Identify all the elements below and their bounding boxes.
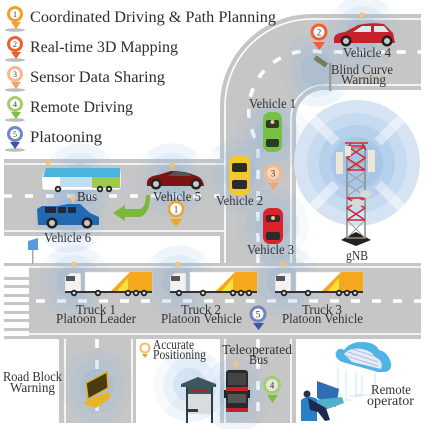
truck 3: [275, 261, 363, 296]
label: truck 1: Truck 1: [76, 302, 116, 317]
label: vehicle 1: Vehicle 1: [249, 96, 296, 111]
legend item 1: Coordinated Driving & Path Planning: [30, 9, 276, 26]
teleoperated bus: [224, 360, 250, 412]
legend item 2: Real-time 3D Mapping: [30, 39, 178, 56]
label: gNB: gNB: [346, 248, 368, 263]
pin 5: [251, 307, 265, 330]
icon: accurate positioning: [140, 344, 150, 358]
label: truck 1: Platoon Leader: [56, 311, 136, 326]
label: vehicle 6: Vehicle 6: [44, 230, 91, 245]
label: truck 3: Platoon Vehicle: [282, 311, 363, 326]
truck 2: [170, 261, 257, 296]
label: teleoperated bus: Bus: [249, 352, 268, 367]
label: vehicle 5: Vehicle 5: [153, 189, 201, 204]
legend item 3: [5, 68, 165, 92]
vehicle 1 green car: [263, 112, 282, 152]
gNB tower: [336, 143, 375, 246]
truck 1: [65, 261, 152, 296]
legend item 5: [5, 128, 102, 152]
legend item 3: 3: [13, 70, 17, 79]
road: lower horizontal road: [29, 263, 421, 339]
bus: [42, 159, 121, 192]
pin 2: [312, 25, 326, 50]
crosswalk: [4, 263, 29, 339]
road: bottom-right side road: [220, 339, 296, 423]
label: road block warning: Warning: [10, 380, 55, 395]
legend item 4: [5, 98, 133, 122]
gNB coverage circle: [294, 100, 420, 226]
label: accurate positioning: [153, 337, 206, 362]
road block sign: [84, 372, 110, 408]
road: curved main road: [220, 14, 421, 263]
label: accurate positioning: Positioning: [153, 347, 206, 362]
vehicle 2 yellow car: [229, 155, 250, 196]
label: vehicle 2: Vehicle 2: [216, 193, 263, 208]
icon: remote operator at desk: [301, 381, 344, 421]
label: road block warning: [3, 369, 62, 395]
label: vehicle 3: Vehicle 3: [247, 242, 294, 257]
bus stop: [181, 377, 216, 423]
cloud connectors: [338, 368, 375, 400]
vehicle 3 red car: [263, 208, 283, 244]
pin 1: [169, 202, 183, 227]
legend item 4: Remote Driving: [30, 99, 133, 116]
legend item 1: [5, 8, 276, 32]
label: blind curve warning: Warning: [341, 72, 386, 87]
label: truck 3: Truck 3: [302, 302, 342, 317]
label: remote operator: [367, 382, 415, 408]
label: accurate positioning: Accurate: [153, 337, 194, 352]
label: truck 2: Truck 2: [181, 302, 221, 317]
pin 4: [263, 376, 281, 403]
legend item 2: 2: [13, 40, 17, 49]
road: left horizontal road: [4, 159, 224, 236]
road: bottom-left side road: [59, 339, 136, 423]
label: teleoperated bus: Teleoperated: [222, 342, 292, 357]
label: bus: Bus: [77, 189, 97, 204]
pin 1: 1: [174, 204, 178, 214]
label: blind curve warning: Blind Curve: [331, 62, 393, 77]
icon: cloud: [336, 342, 391, 372]
label: truck 2: Platoon Vehicle: [161, 311, 242, 326]
blind curve warning sign: [314, 55, 331, 91]
label: teleoperated bus: [222, 342, 292, 367]
vehicle 4 red car: [334, 12, 395, 46]
road sign: [28, 238, 38, 264]
legend item 2: [5, 38, 178, 62]
label: blind curve warning: [331, 62, 393, 87]
legend: [5, 8, 276, 152]
label: truck 2: [161, 302, 242, 326]
label: truck 3: [282, 302, 363, 326]
pin 4: 4: [270, 380, 275, 390]
pin 3: [264, 164, 282, 190]
label: truck 1: [56, 302, 136, 326]
label: road block warning: Road Block: [3, 369, 62, 384]
green turn arrow: [113, 195, 150, 221]
pin 2: 2: [317, 28, 321, 38]
pin 3: 3: [271, 168, 276, 178]
label: remote operator: operator: [367, 393, 415, 408]
label: vehicle 4: Vehicle 4: [343, 45, 391, 60]
vehicle 5 dark red car: [147, 162, 204, 190]
label: remote operator: Remote: [371, 382, 411, 397]
legend item 5: Platooning: [30, 129, 102, 146]
pin 5: 5: [256, 310, 261, 320]
legend item 4: 4: [13, 100, 17, 109]
legend item 3: Sensor Data Sharing: [30, 69, 165, 86]
legend item 5: 5: [13, 130, 17, 139]
vehicle 6 blue suv: [37, 195, 99, 228]
legend item 1: 1: [13, 10, 17, 19]
